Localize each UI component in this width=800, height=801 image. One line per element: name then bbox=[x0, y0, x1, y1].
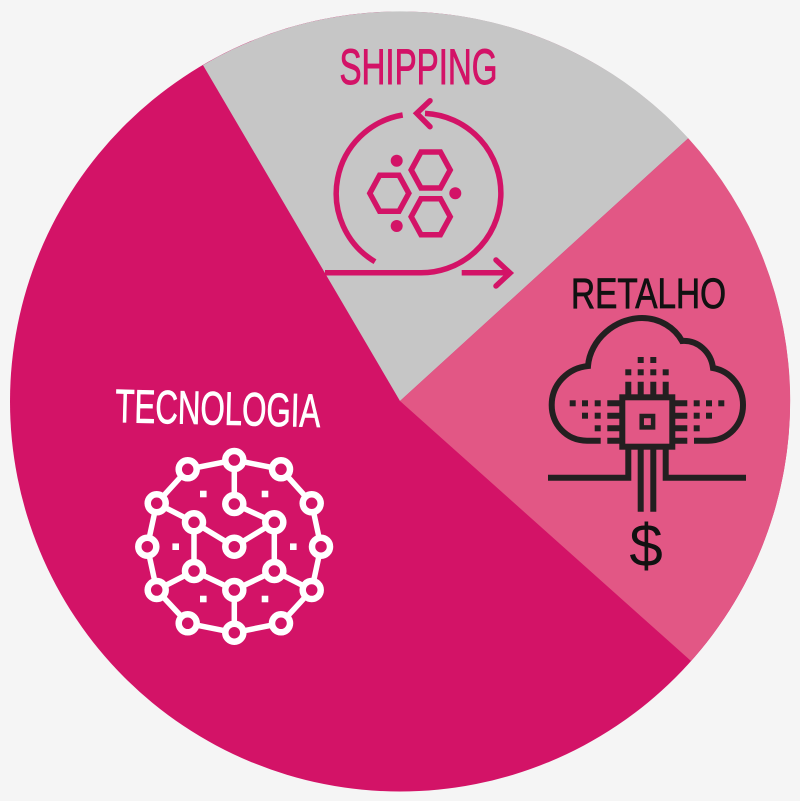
icon: shipping cycle with hexagons bbox=[325, 101, 510, 286]
icon: dollar sign: $ bbox=[629, 512, 663, 579]
heading: shipping: SHIPPING bbox=[340, 39, 498, 95]
slice: shipping bbox=[203, 11, 688, 401]
heading: tecnologia: TECNOLOGIA bbox=[115, 379, 321, 437]
slice: retalho bbox=[400, 138, 790, 661]
icon: molecular network bbox=[138, 451, 330, 642]
icon: cloud with microchip bbox=[548, 318, 746, 512]
heading: retalho: RETALHO bbox=[571, 270, 726, 318]
